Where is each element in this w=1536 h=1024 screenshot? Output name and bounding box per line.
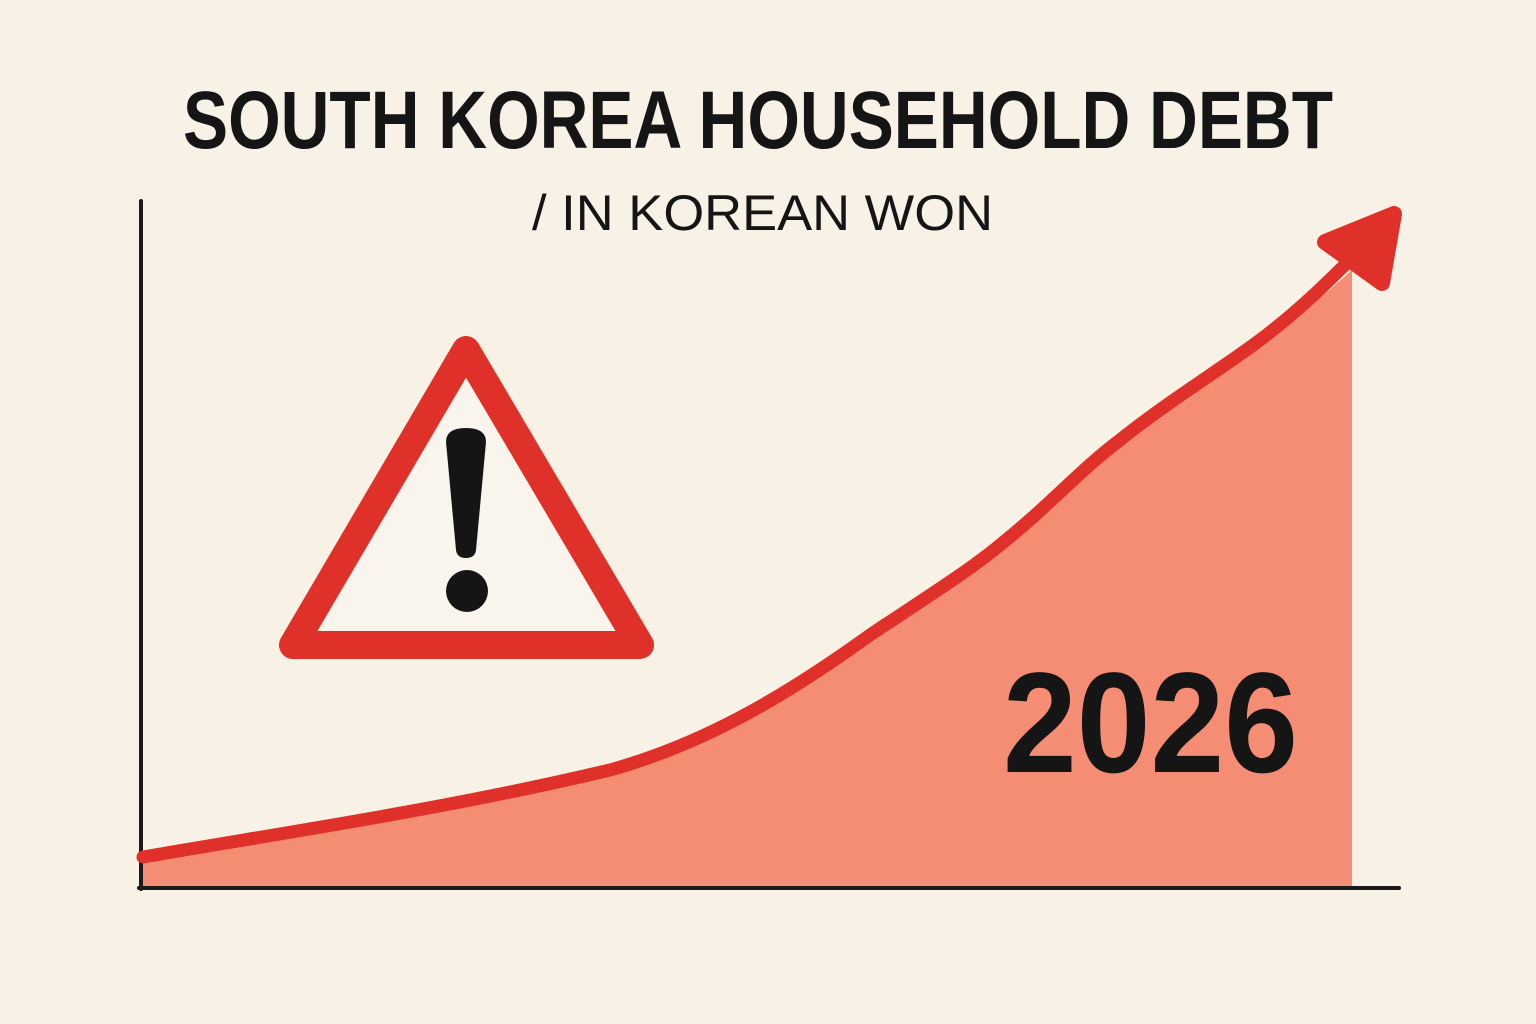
chart axes xyxy=(139,201,1399,889)
year label: 2026 xyxy=(1003,644,1298,803)
area fill under curve xyxy=(143,270,1352,886)
icon: warning triangle xyxy=(293,350,640,645)
trend line with arrow xyxy=(143,214,1394,857)
subtitle: / IN KOREAN WON xyxy=(532,185,993,241)
exclamation mark xyxy=(446,428,486,558)
arrowhead xyxy=(1325,214,1394,283)
